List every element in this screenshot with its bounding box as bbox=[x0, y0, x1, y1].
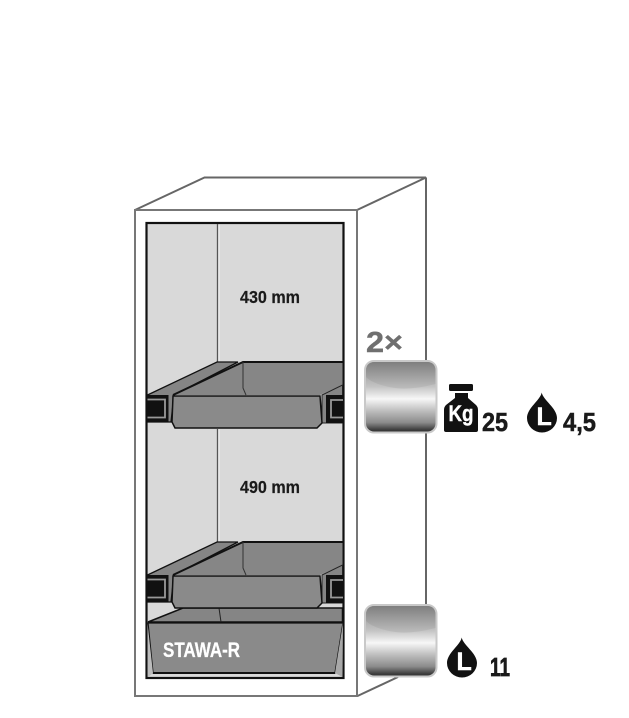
volume value: 11: 11 bbox=[490, 652, 510, 682]
icon: lower steel sump swatch bbox=[365, 605, 436, 676]
label: STAWA-R: STAWA-R bbox=[163, 639, 240, 662]
cabinet body bbox=[135, 178, 426, 696]
upper shelf tray bbox=[148, 362, 343, 428]
volume value: 4,5: 4,5 bbox=[563, 407, 596, 437]
icon: drop litres upper: L bbox=[536, 403, 552, 431]
quantity: 2x: 2× bbox=[366, 327, 403, 359]
icon: weight Kg: Kg bbox=[448, 401, 474, 426]
dimension: 430 mm: 430 mm bbox=[240, 287, 300, 307]
lower shelf tray bbox=[148, 542, 343, 603]
icon: drop litres lower: L bbox=[456, 648, 472, 676]
dimension: 490 mm: 490 mm bbox=[240, 477, 300, 497]
lower shelf tray front bbox=[172, 576, 322, 608]
icon: upper steel shelf swatch bbox=[365, 361, 436, 432]
sump tray STAWA-R bbox=[148, 608, 343, 677]
icon: drop litres upper bbox=[527, 392, 557, 432]
load value: 25: 25 bbox=[482, 407, 508, 437]
icon: weight Kg bbox=[444, 384, 478, 432]
icon: drop litres lower bbox=[447, 638, 477, 678]
cabinet interior bbox=[146, 223, 344, 678]
